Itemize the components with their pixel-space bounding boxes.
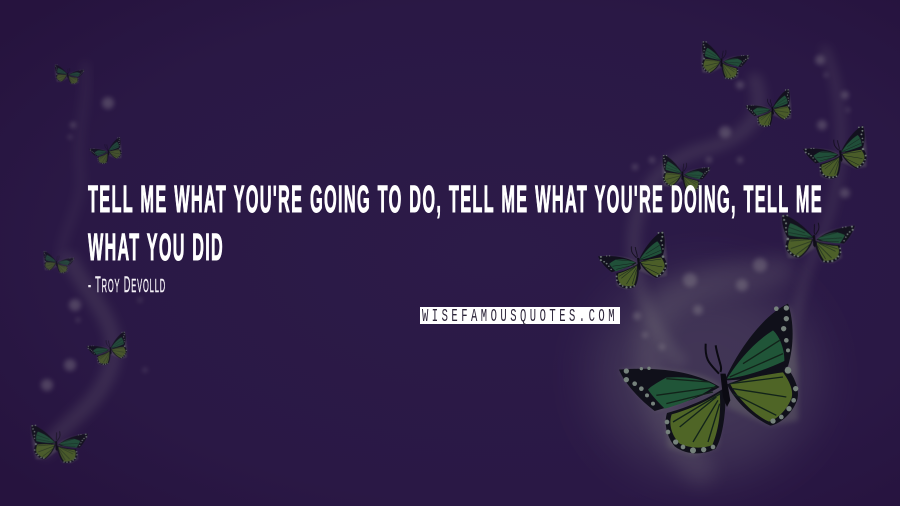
watermark logo: WISEFAMOUSQUOTES.COM	[422, 307, 618, 327]
swirl: lower right band	[650, 270, 780, 470]
glow behind large butterfly	[595, 275, 815, 475]
butterfly: top right 1	[700, 38, 751, 82]
swirl: lower left band	[45, 260, 114, 450]
butterfly: left middle	[42, 247, 77, 276]
butterfly: far right	[803, 126, 867, 179]
butterfly: bottom left	[28, 414, 94, 470]
butterfly: behind quote	[660, 150, 713, 195]
swirl: left band	[60, 65, 86, 265]
swirl: centre arc	[634, 80, 759, 360]
butterfly: left top	[53, 60, 87, 87]
butterfly: left lower	[87, 331, 127, 365]
author: - TROY DEVOLLD	[88, 272, 166, 297]
butterfly: centre right	[598, 231, 667, 289]
quote text	[88, 179, 823, 269]
butterfly: top right 2	[745, 89, 791, 127]
swirl: right arc	[785, 50, 841, 400]
butterfly: large	[619, 304, 798, 455]
quote text: WHAT YOU DID	[88, 227, 224, 269]
butterfly: left upper	[89, 137, 122, 164]
watermark logo	[420, 307, 620, 327]
butterfly: right middle	[778, 201, 862, 271]
light swirls	[45, 50, 841, 470]
sparkles	[41, 55, 850, 391]
